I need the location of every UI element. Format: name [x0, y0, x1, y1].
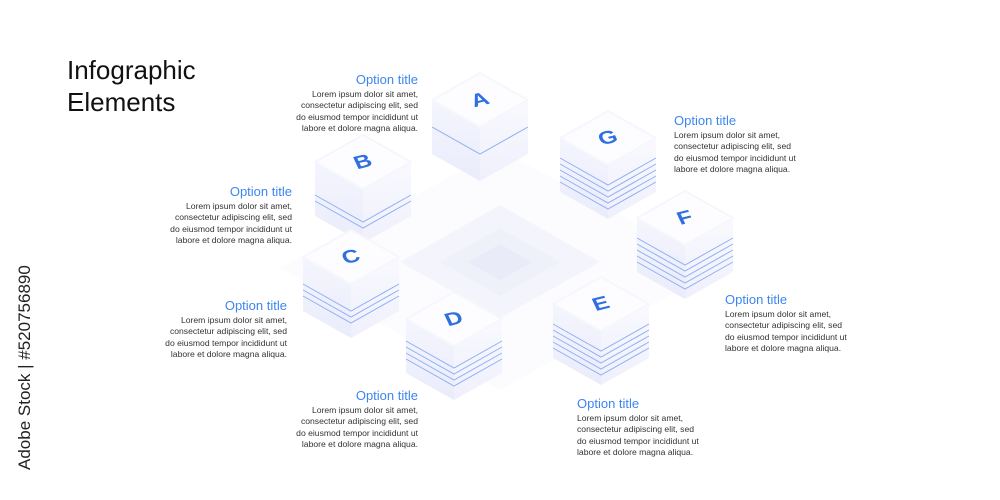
- text: E: do eiusmod tempor incididunt ut: [577, 436, 699, 446]
- text: G: labore et dolore magna aliqua.: [674, 164, 790, 174]
- cube G: G: [594, 126, 621, 149]
- cube B: [315, 135, 411, 243]
- text: G: Lorem ipsum dolor sit amet,: [674, 130, 780, 140]
- cube D: [406, 292, 502, 400]
- text: E: Lorem ipsum dolor sit amet,: [577, 413, 683, 423]
- text: D: labore et dolore magna aliqua.: [302, 439, 418, 449]
- text: F: [725, 292, 847, 353]
- text: D: [296, 388, 418, 449]
- text: F: do eiusmod tempor incididunt ut: [725, 332, 847, 342]
- text: D: Option title: [356, 388, 418, 403]
- text: F: Lorem ipsum dolor sit amet,: [725, 309, 831, 319]
- text: A: [296, 72, 418, 133]
- text: E: Option title: [577, 396, 639, 411]
- text: B: do eiusmod tempor incididunt ut: [170, 224, 292, 234]
- text: B: labore et dolore magna aliqua.: [176, 235, 292, 245]
- text: A: consectetur adipiscing elit, sed: [301, 100, 418, 110]
- text: C: Option title: [225, 298, 287, 313]
- text: F: labore et dolore magna aliqua.: [725, 343, 841, 353]
- cube G: [560, 111, 656, 219]
- text: G: [674, 113, 796, 174]
- cube B: B: [350, 150, 376, 173]
- text: G: consectetur adipiscing elit, sed: [674, 141, 791, 151]
- side watermark: Adobe Stock | #520756890: [15, 265, 34, 470]
- text: E: labore et dolore magna aliqua.: [577, 447, 693, 457]
- floor: [280, 150, 720, 390]
- cube F: [637, 191, 733, 299]
- title: [67, 55, 196, 117]
- text: A: do eiusmod tempor incididunt ut: [296, 112, 418, 122]
- text: E: [577, 396, 699, 457]
- text: C: labore et dolore magna aliqua.: [171, 349, 287, 359]
- text: C: consectetur adipiscing elit, sed: [170, 326, 287, 336]
- cube A: [432, 73, 528, 181]
- title: Elements: [67, 87, 175, 117]
- title: Infographic: [67, 55, 196, 85]
- cube A: A: [467, 88, 493, 111]
- text: D: Lorem ipsum dolor sit amet,: [312, 405, 418, 415]
- cube C: C: [338, 245, 364, 268]
- text: B: Lorem ipsum dolor sit amet,: [186, 201, 292, 211]
- text: B: Option title: [230, 184, 292, 199]
- text: D: do eiusmod tempor incididunt ut: [296, 428, 418, 438]
- cube E: [553, 277, 649, 385]
- text: E: consectetur adipiscing elit, sed: [577, 424, 694, 434]
- text: D: consectetur adipiscing elit, sed: [301, 416, 418, 426]
- text: G: Option title: [674, 113, 736, 128]
- text: A: Lorem ipsum dolor sit amet,: [312, 89, 418, 99]
- cube C: [303, 230, 399, 338]
- text: C: [165, 298, 287, 359]
- text: A: labore et dolore magna aliqua.: [302, 123, 418, 133]
- text: G: do eiusmod tempor incididunt ut: [674, 153, 796, 163]
- text: F: Option title: [725, 292, 787, 307]
- text: A: Option title: [356, 72, 418, 87]
- cube D: D: [441, 307, 467, 330]
- text: B: [170, 184, 292, 245]
- cube E: E: [589, 292, 613, 315]
- text: C: Lorem ipsum dolor sit amet,: [181, 315, 287, 325]
- cube F: F: [673, 206, 696, 229]
- text: C: do eiusmod tempor incididunt ut: [165, 338, 287, 348]
- text: B: consectetur adipiscing elit, sed: [175, 212, 292, 222]
- text: F: consectetur adipiscing elit, sed: [725, 320, 842, 330]
